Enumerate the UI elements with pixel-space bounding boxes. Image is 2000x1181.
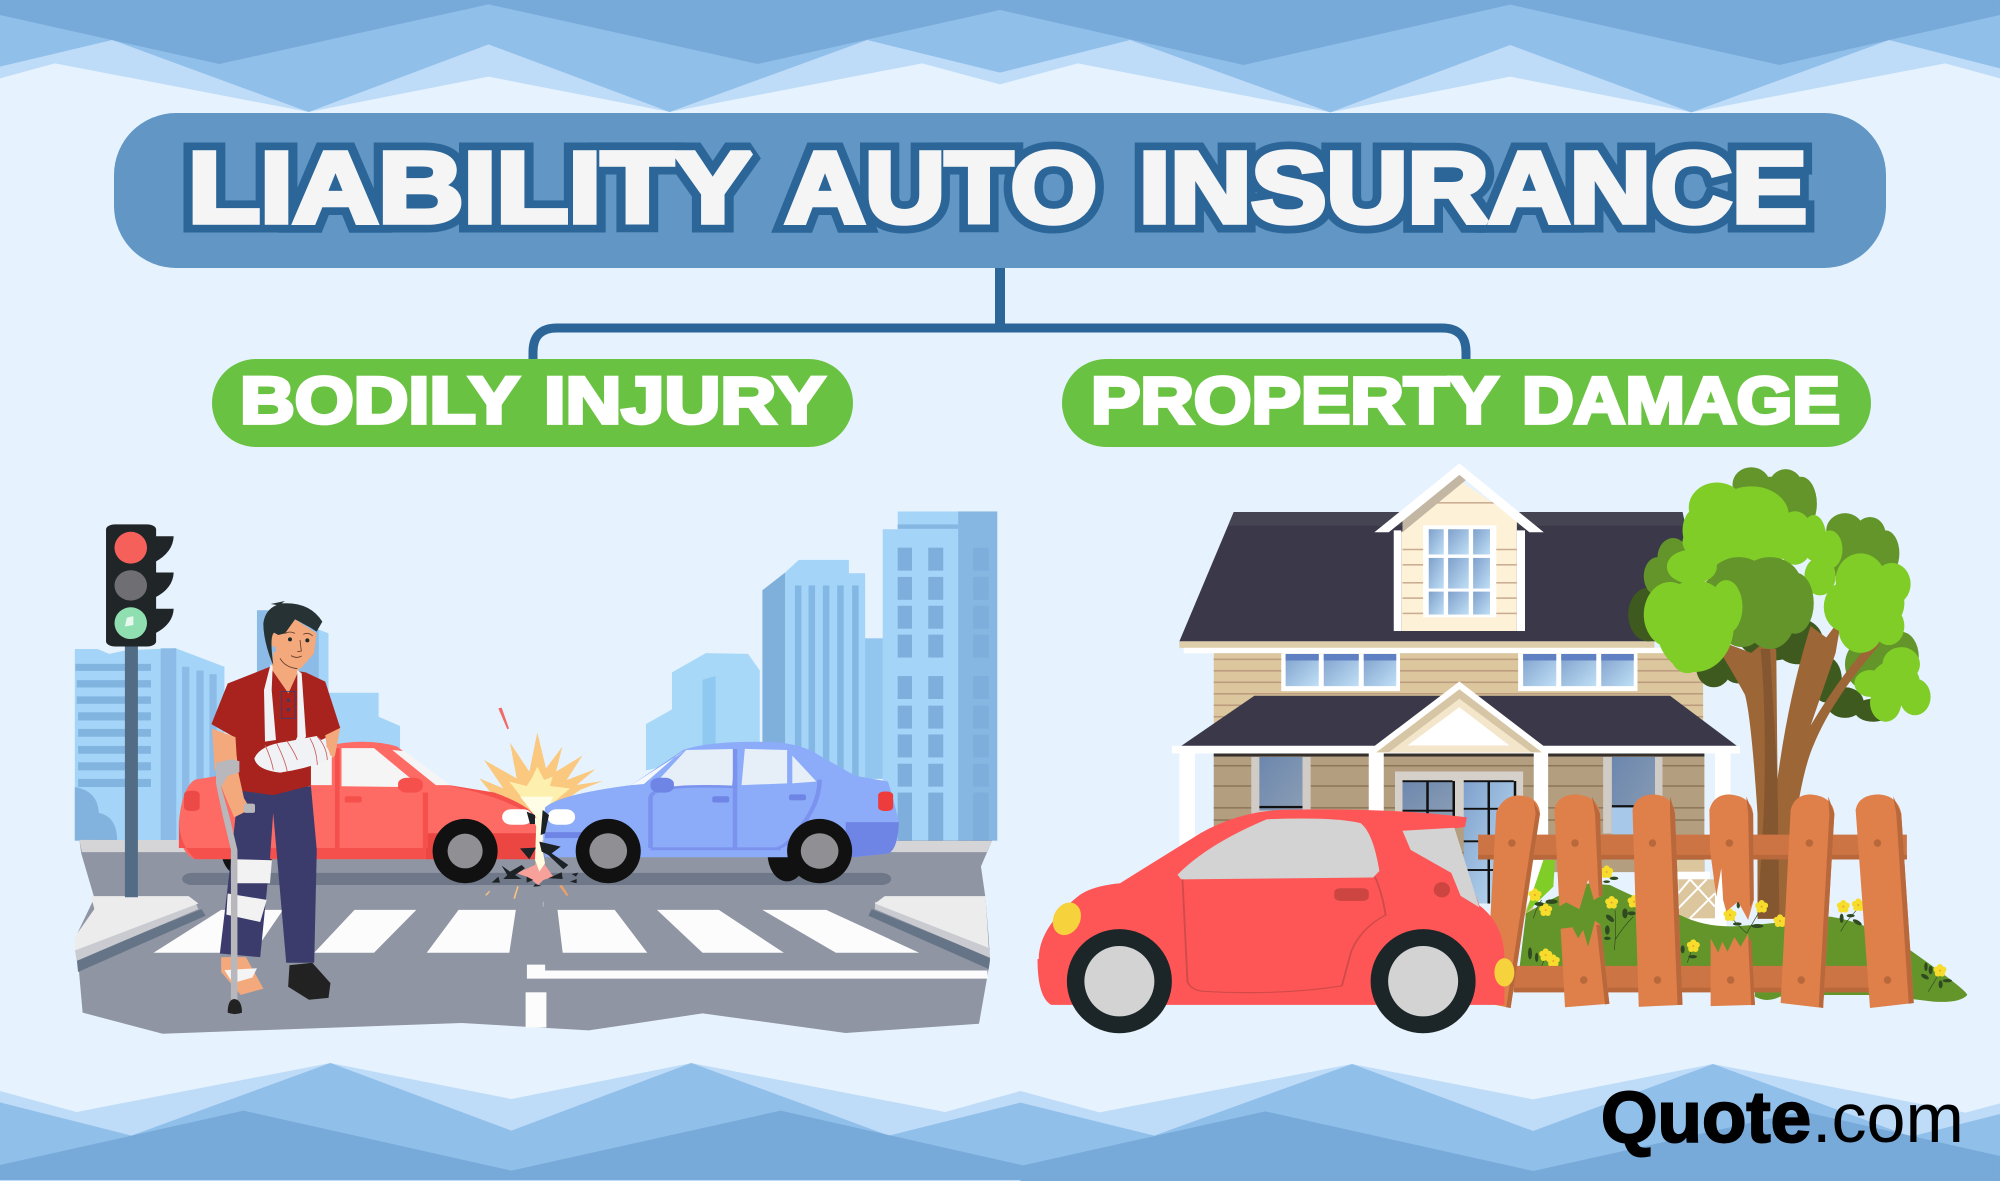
- heading: bodily injury: BODILY: [240, 363, 518, 437]
- collision debris and sparks: [485, 708, 578, 907]
- red car: [179, 742, 540, 883]
- red car hitting fence: [1038, 809, 1514, 1033]
- man's head, sling and cast: [254, 601, 331, 773]
- logo: Quote.com: Quote: [1601, 1078, 1811, 1158]
- title banner: [114, 113, 1886, 268]
- top zigzag banner: [0, 0, 2000, 112]
- upper windows: [1281, 653, 1638, 691]
- blue car: [543, 742, 899, 883]
- road and crosswalk: [75, 840, 992, 1034]
- broken wooden fence: [1478, 794, 1914, 1008]
- illustration: bodily injury car crash scene: [75, 511, 997, 1034]
- logo: Quote.com: [1601, 1078, 1964, 1158]
- tree: [1628, 467, 1931, 919]
- garden bed with flowers: [1517, 860, 1967, 1002]
- traffic light: [106, 524, 174, 897]
- house: [1172, 463, 1740, 903]
- logo: Quote.com: .com: [1812, 1079, 1964, 1157]
- title banner: AUTO: [785, 132, 1097, 244]
- heading: bodily injury: INJURY: [544, 363, 825, 437]
- title banner: INSURANCE: [1139, 132, 1807, 244]
- connector lines: [533, 268, 1466, 360]
- dormer: [1374, 463, 1544, 631]
- title banner: INSURANCE: [1139, 132, 1807, 244]
- title banner: AUTO: [785, 132, 1097, 244]
- city buildings: [75, 511, 997, 841]
- heading: property damage: PROPERTY: [1091, 363, 1497, 437]
- injured man with crutch: [211, 667, 340, 1014]
- explosion burst behind cars: [479, 732, 603, 843]
- heading: bodily injury: [212, 359, 853, 447]
- bottom zigzag banner: [0, 1063, 2000, 1181]
- heading: property damage: DAMAGE: [1522, 363, 1840, 437]
- title banner: LIABILITY: [188, 132, 751, 244]
- lower wall and porch: [1172, 682, 1740, 903]
- heading: property damage: [1062, 359, 1871, 447]
- title banner: LIABILITY: [188, 132, 751, 244]
- illustration: property damage scene: [1038, 463, 1967, 1033]
